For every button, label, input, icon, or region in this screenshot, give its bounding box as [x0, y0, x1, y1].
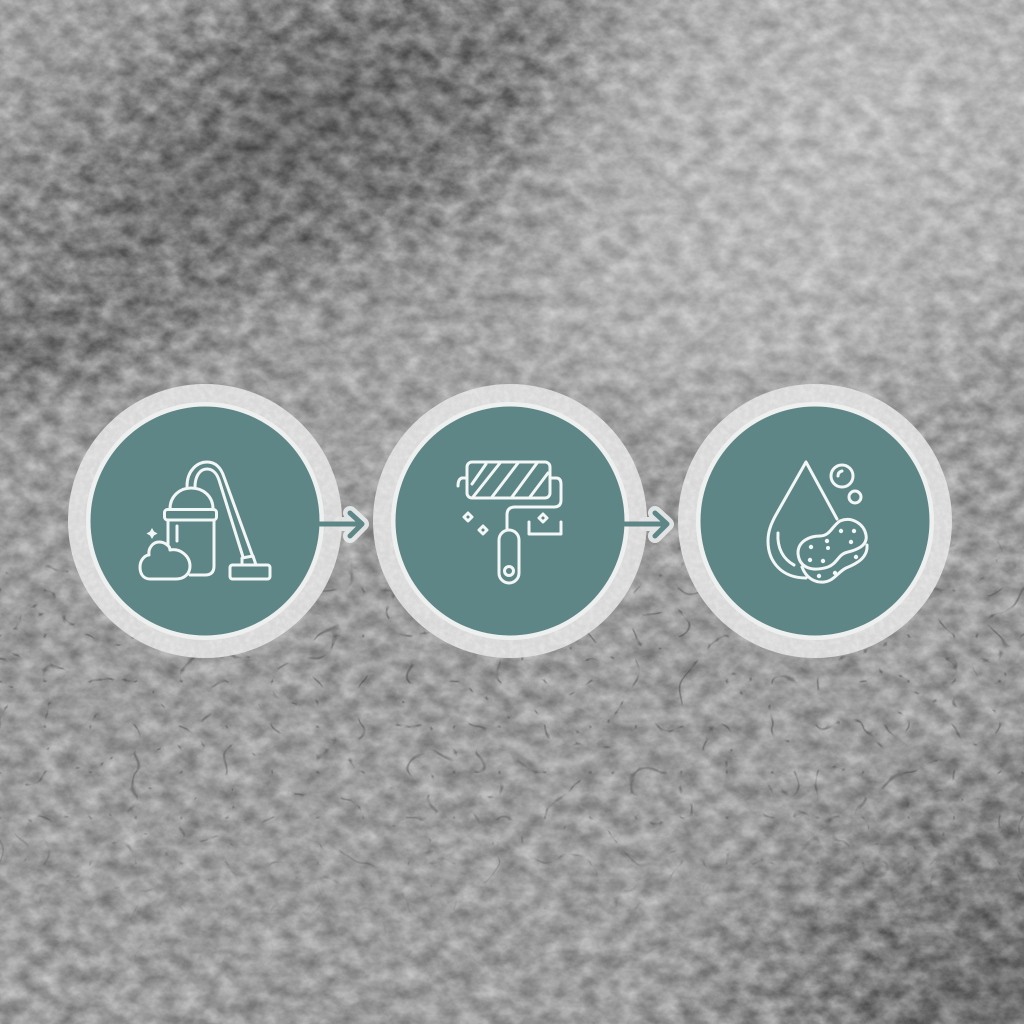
icon: paint roller [458, 462, 561, 583]
arrow halo 2 [645, 513, 667, 536]
outer ring 3 [678, 384, 952, 658]
icon: drop and sponge [768, 462, 867, 582]
icon: vacuum cleaner [140, 462, 270, 579]
inner ring 3 [696, 402, 934, 640]
inner ring 1 [86, 402, 324, 640]
teal disc 1 [90, 406, 320, 636]
inner ring 2 [391, 402, 629, 640]
teal disc 2 [396, 406, 624, 636]
arrow 2 [625, 513, 667, 536]
teal disc 3 [700, 406, 930, 636]
panel: step 1 vacuum cleaner [68, 384, 342, 658]
outer ring 2 [373, 384, 647, 658]
outer ring 1 [68, 384, 342, 658]
arrow 1 [320, 513, 362, 536]
arrow halo 1 [340, 513, 362, 536]
panel: step 3 water drop and sponge [625, 384, 952, 658]
panel: step 2 paint roller [320, 384, 647, 658]
